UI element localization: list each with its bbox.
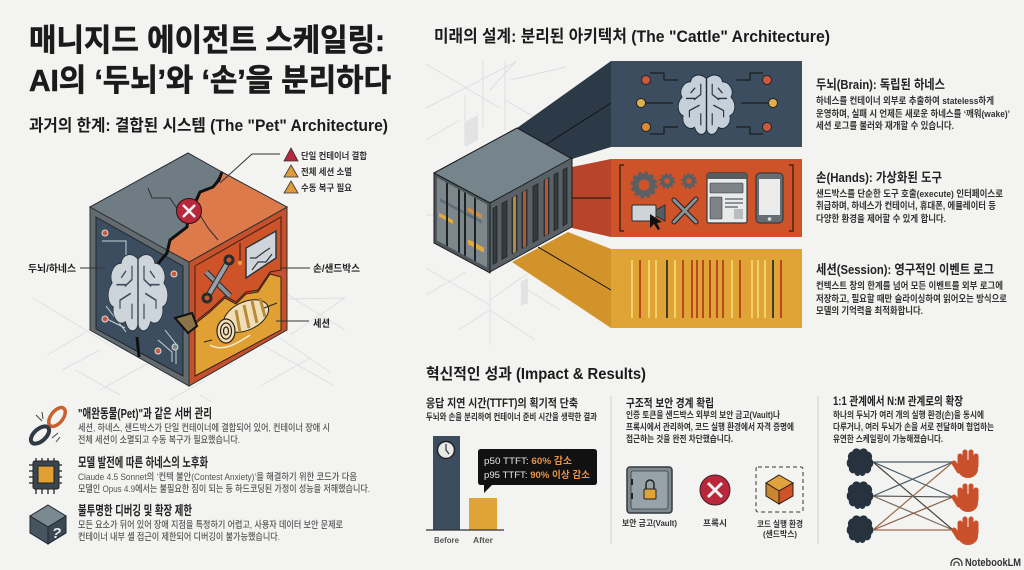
text: ttft: 응답 지연 시간(TTFT)의 획기적 단축 xyxy=(426,396,578,410)
camera xyxy=(632,205,665,230)
circuit traces xyxy=(102,241,176,364)
callout xyxy=(478,449,597,493)
icon: proxy: 프록시 xyxy=(703,518,727,528)
phone xyxy=(756,173,783,223)
cube left face xyxy=(90,207,189,386)
icon: vault: 보안 금고(Vault) xyxy=(622,518,677,528)
text: brain: 하네스를 컨테이너 외부로 추출하여 stateless하게 xyxy=(816,95,994,107)
text: debugging limits: 불투명한 디버깅 및 확장 제한 xyxy=(78,503,192,518)
panel: hands xyxy=(611,159,802,237)
bar: after xyxy=(469,498,497,530)
cube right face xyxy=(189,207,287,386)
brain icon xyxy=(678,75,735,134)
text: debugging limits: 컨테이너 내부 셸 접근이 제한되어 디버깅이 불가능했습니다. xyxy=(78,531,280,543)
warning 2 xyxy=(284,165,352,177)
label: hands / sandbox xyxy=(280,262,360,275)
spiral scroll icon xyxy=(204,293,277,348)
label: brain / harness xyxy=(28,262,105,275)
callout: p50 TTFT: 60% 감소 xyxy=(484,455,572,467)
label: session: 세션 xyxy=(313,317,330,330)
bar chart xyxy=(426,436,504,545)
panel: session xyxy=(611,249,802,328)
text: n:m scaling: 유연한 스케일링이 가능해졌습니다. xyxy=(833,433,943,444)
text: pet servers: "애완동물(Pet)"과 같은 서버 관리 xyxy=(78,406,212,421)
text: n:m scaling: 하나의 두뇌가 여러 개의 실행 환경(손)을 동시에 xyxy=(833,409,984,420)
icon: mystery box: ? xyxy=(52,525,61,542)
icon: sandbox: 코드 실행 환경 xyxy=(757,519,803,529)
text: hands: 취급하며, 하네스가 컨테이너, 휴대폰, 에뮬레이터 등 xyxy=(816,200,996,212)
tools xyxy=(674,199,696,222)
clock icon xyxy=(438,442,454,458)
cube top orange xyxy=(167,172,287,262)
text: security boundary: 구조적 보안 경계 확립 xyxy=(626,396,714,410)
cube top gray xyxy=(90,153,222,250)
container xyxy=(434,128,572,273)
bar chart: Before xyxy=(434,535,459,545)
icon: sandbox: (샌드박스) xyxy=(763,529,797,539)
label: hands / sandbox: 손/샌드박스 xyxy=(313,262,360,275)
text: ttft xyxy=(426,396,598,422)
connector: brain xyxy=(517,61,611,159)
label: brain / harness: 두뇌/하네스 xyxy=(28,262,76,275)
text: ttft: 두뇌와 손을 분리하여 컨테이너 준비 시간을 생략한 결과 xyxy=(426,411,598,422)
text: security boundary xyxy=(626,396,794,444)
text: hands: 샌드박스를 단순한 도구 호출(execute) 인터페이스로 xyxy=(816,188,1003,200)
error badge xyxy=(176,198,202,224)
icon: mystery box xyxy=(30,505,66,544)
crack xyxy=(157,172,222,272)
title: 매니지드 에이전트 스케일링: xyxy=(29,23,385,58)
text: n:m scaling xyxy=(833,394,994,444)
heading: pet architecture: 과거의 한계: 결합된 시스템 (The "Pet" Architecture) xyxy=(29,116,388,135)
text: pet servers: 전체 세션이 소멸되고 수동 복구가 필요했습니다. xyxy=(78,434,240,446)
text: harness aging xyxy=(78,455,370,495)
connector: session xyxy=(512,232,611,328)
text: brain xyxy=(816,77,1010,132)
heading: cattle architecture: 미래의 설계: 분리된 아키텍처 (The "Cattle" Architecture) xyxy=(434,27,830,46)
illustration: container with three streams xyxy=(434,61,802,328)
label: session xyxy=(276,317,330,330)
text: debugging limits: 모든 요소가 뒤어 있어 장애 지점을 특정하기 어렵고, 사용자 데이터 보안 문제로 xyxy=(78,519,343,531)
text: hands: 다양한 환경을 제어할 수 있게 합니다. xyxy=(816,213,946,225)
heading: impact: 혁신적인 성과 (Impact & Results) xyxy=(426,365,646,383)
text: session xyxy=(816,262,1007,317)
text: session: 세션(Session): 영구적인 이벤트 로그 xyxy=(816,262,994,277)
text: session: 컨텍스트 창의 한계를 넘어 모든 이벤트를 외부 로그에 xyxy=(816,280,1003,292)
bar chart: After xyxy=(473,535,494,545)
text: security boundary: 인증 토큰을 샌드박스 외부의 보안 금고(Vault)나 xyxy=(626,409,781,420)
text: n:m scaling: 다루거나, 여러 두뇌가 손을 서로 전달하며 협업하는 xyxy=(833,421,994,432)
icon: sandbox xyxy=(756,467,803,539)
title: AI의 ‘두뇌’와 ‘손’을 분리하다 xyxy=(29,63,391,98)
text: security boundary: 프록시에서 관리하여, 코드 실행 환경에서 자격 증명에 xyxy=(626,421,794,432)
icon: proxy xyxy=(700,475,730,528)
cube session panel xyxy=(195,274,281,376)
text: harness aging: 모델 발전에 따른 하네스의 노후화 xyxy=(78,455,208,470)
gears xyxy=(632,173,696,197)
window icon xyxy=(246,231,276,278)
brain in cube xyxy=(108,255,168,331)
diagram: many-to-many xyxy=(847,449,978,545)
connector: hands xyxy=(572,159,611,237)
panel: brain xyxy=(611,61,802,147)
text: brain: 세션 로그를 불러와 재개할 수 있습니다. xyxy=(816,120,954,132)
warnings xyxy=(220,148,368,193)
warning 3: 수동 복구 필요 xyxy=(301,182,352,193)
text: pet servers: 세션, 하네스, 샌드박스가 단일 컨테이너에 결합되어 있어, 컨테이너 장애 시 xyxy=(78,422,330,434)
icon: chip xyxy=(29,458,62,494)
bar: before xyxy=(433,436,460,530)
illustration: coupled cube xyxy=(90,153,287,386)
browser xyxy=(707,173,747,223)
text: hands: 손(Hands): 가상화된 도구 xyxy=(816,170,942,185)
text: harness aging: Claude 4.5 Sonnet의 ‘컨텍 불안(Contest Anxiety)’을 해결하기 위한 코드가 다음 xyxy=(78,471,357,483)
text: harness aging: 모델인 Opus 4.9에서는 불필요한 짐이 되는 등 하드코딩된 가정이 성능을 저해했습니다. xyxy=(78,483,370,495)
cube left panel xyxy=(96,217,183,376)
dark brains xyxy=(847,449,873,542)
hands xyxy=(954,452,978,545)
icon: vault xyxy=(622,467,677,528)
text: security boundary: 접근하는 것을 완전 차단했습니다. xyxy=(626,433,733,444)
icon: broken chain xyxy=(28,405,69,447)
warning 1: 단일 컨테이너 결합 xyxy=(301,150,368,161)
title xyxy=(29,23,391,98)
callout: p95 TTFT: 90% 이상 감소 xyxy=(484,469,590,481)
cube hands panel xyxy=(195,217,281,322)
text: pet servers xyxy=(78,406,330,446)
text: session: 모델의 기억력을 최적화합니다. xyxy=(816,305,923,317)
text: brain: 두뇌(Brain): 독립된 하네스 xyxy=(816,77,945,92)
container doors xyxy=(434,173,490,273)
warning 2: 전체 세션 소멸 xyxy=(301,166,352,177)
text: debugging limits xyxy=(78,503,343,543)
text: n:m scaling: 1:1 관계에서 N:M 관계로의 확장 xyxy=(833,394,963,408)
text: hands xyxy=(816,170,1003,225)
warning 1 xyxy=(284,148,368,161)
container corrugated side xyxy=(490,158,572,272)
warning 3 xyxy=(284,181,352,193)
tools icon xyxy=(203,256,233,302)
